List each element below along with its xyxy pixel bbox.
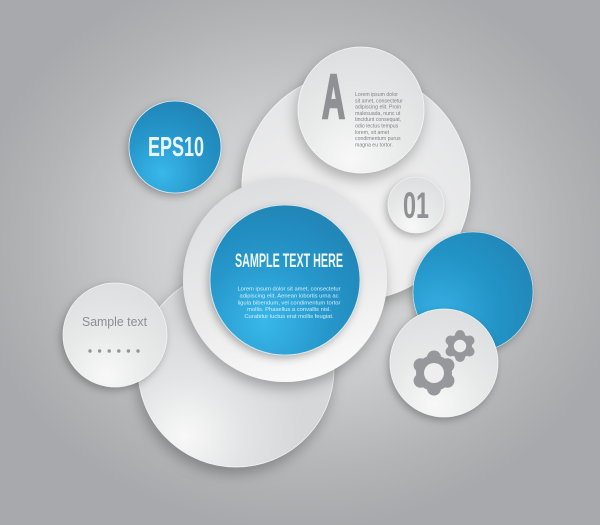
panel: number 01 circle bbox=[388, 177, 444, 233]
main heading: SAMPLE TEXT HERE bbox=[235, 251, 343, 272]
icon: large gear bbox=[414, 350, 454, 396]
paragraph bbox=[355, 92, 403, 148]
paragraph: magna eu tortor. bbox=[355, 142, 393, 148]
main body text: ligula bibendum, vel condimentum tortor bbox=[238, 300, 340, 306]
paragraph: lorem, sit amet bbox=[355, 130, 390, 136]
icon: small gear bbox=[446, 330, 474, 362]
panel: letter A circle bbox=[298, 47, 424, 173]
panel: large circle bottom left bbox=[138, 271, 334, 467]
main body text: Lorem ipsum dolor sit amet, consectetur bbox=[237, 286, 341, 292]
EPS10 label: EPS10 bbox=[148, 131, 204, 162]
paragraph: Lorem ipsum dolor bbox=[355, 92, 398, 98]
panel: main blue circle bbox=[210, 205, 360, 355]
paragraph: condimentum purus bbox=[355, 136, 401, 142]
paragraph: tincidunt consequat, bbox=[355, 117, 401, 123]
paragraph: sit amet, consectetur bbox=[355, 98, 403, 104]
main body text: adipiscing elit. Aenean lobortis urna ac bbox=[240, 293, 339, 299]
panel: large circle top right bbox=[242, 72, 470, 300]
paragraph: adipiscing elit. Proin bbox=[355, 105, 401, 111]
letter A: A bbox=[322, 63, 345, 132]
dots bbox=[88, 349, 140, 353]
panel: EPS10 badge bbox=[129, 101, 221, 193]
panel: gears circle bbox=[390, 309, 498, 417]
sample text label: Sample text bbox=[82, 314, 147, 329]
panel: blue circle right bbox=[413, 232, 533, 352]
main body text: mollis. Phasellus a convallis nisl. bbox=[247, 307, 331, 313]
main body text bbox=[237, 286, 341, 320]
panel: main ring bbox=[183, 178, 387, 382]
panel: sample text circle bbox=[63, 283, 167, 387]
paragraph: malesuada, nunc ut bbox=[355, 111, 401, 117]
main body text: Curabitur luctus erat mollis feugiat. bbox=[244, 314, 334, 320]
paragraph: odio lectus tempus bbox=[355, 124, 399, 130]
number 01: 01 bbox=[403, 185, 429, 226]
